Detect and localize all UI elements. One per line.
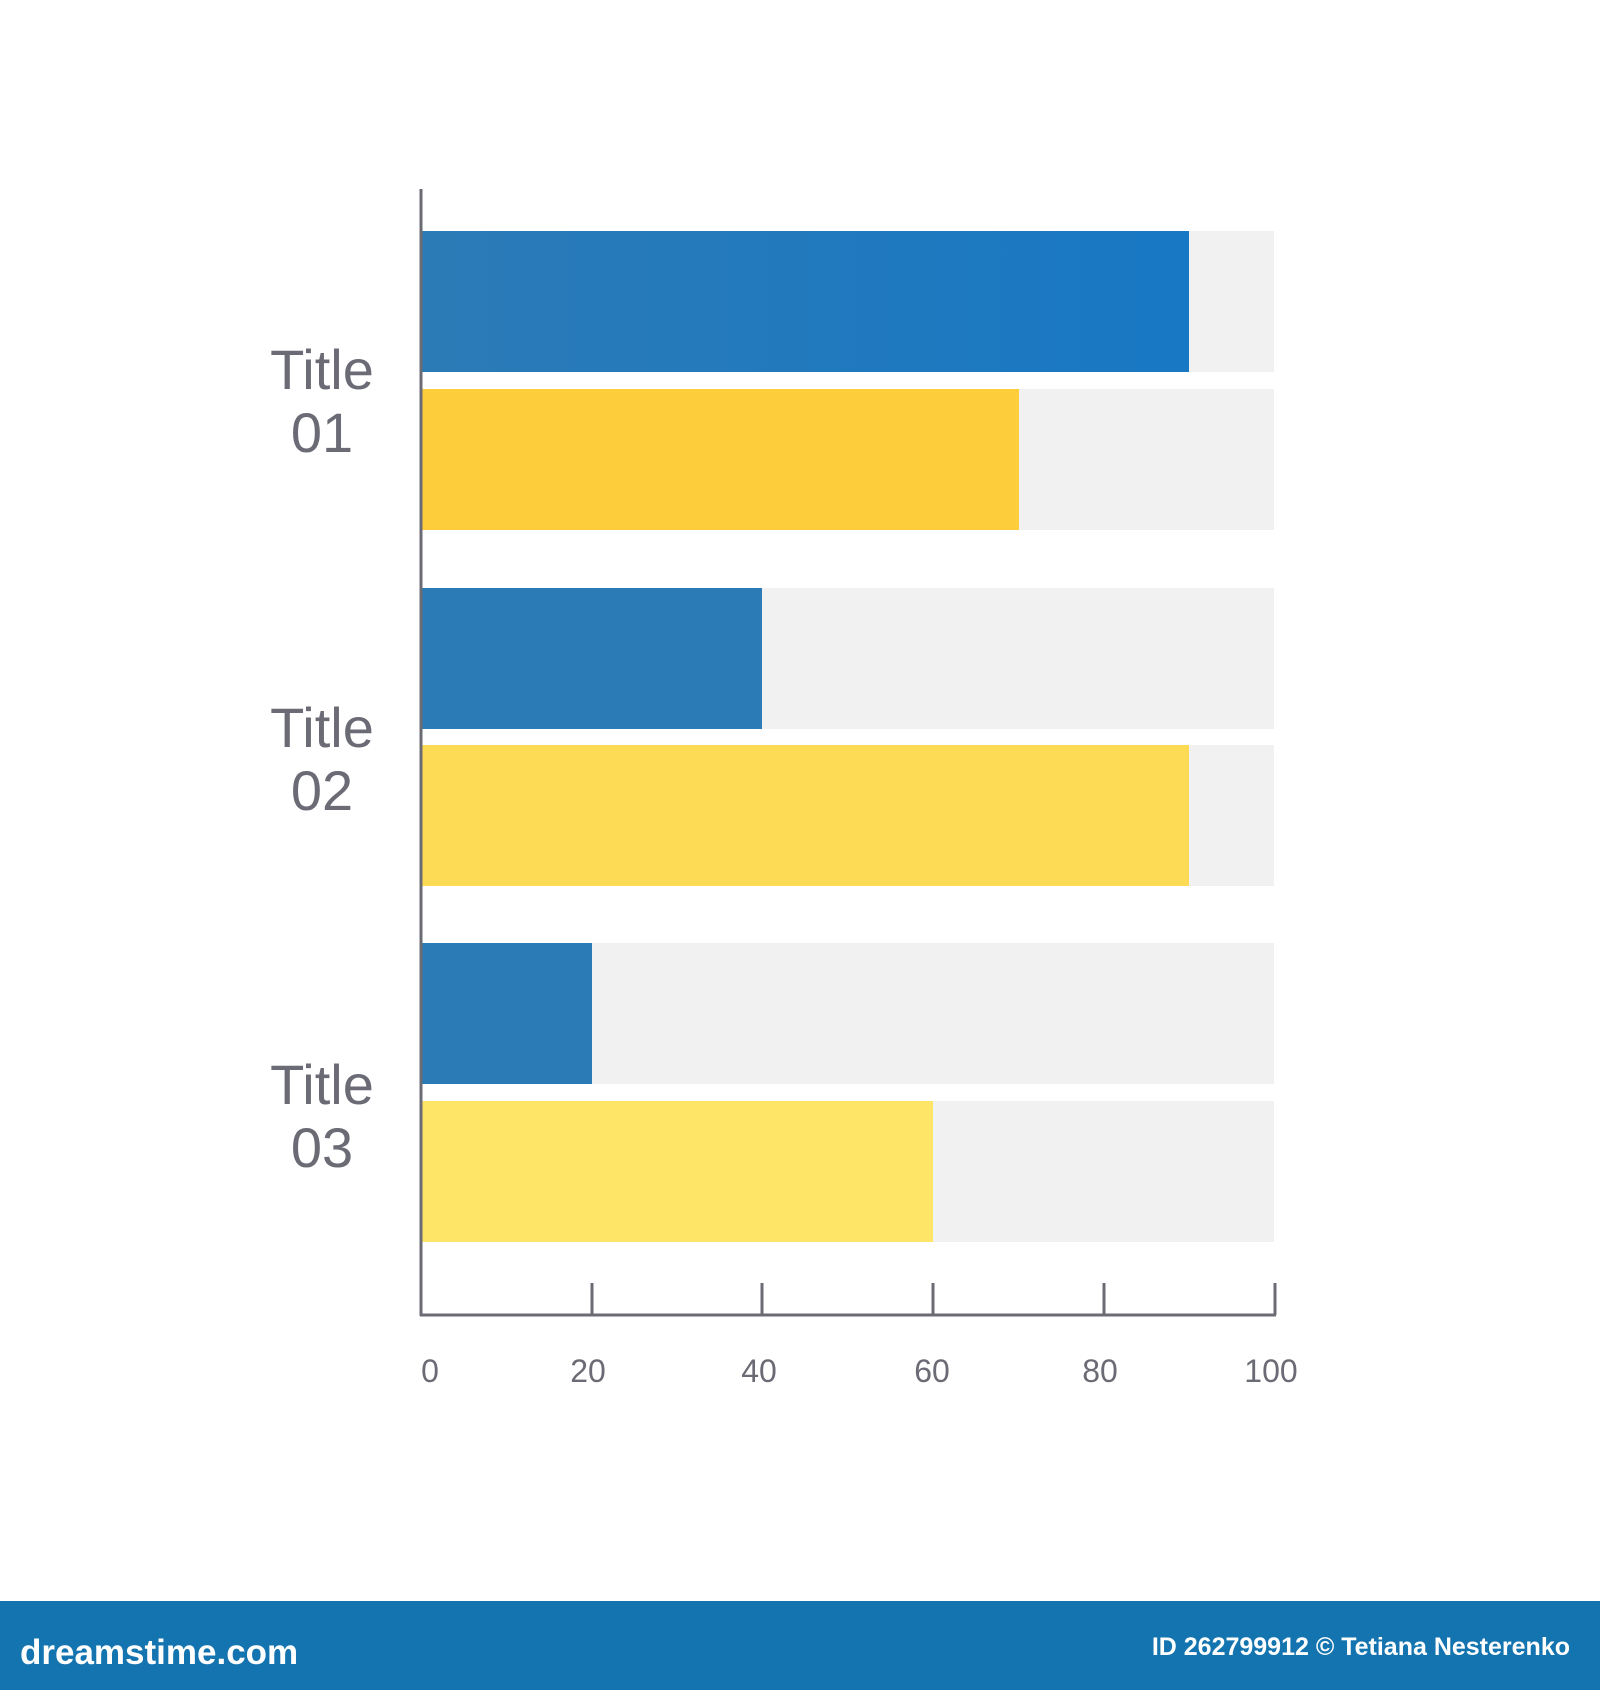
tick labels <box>421 1353 1298 1389</box>
axes <box>420 189 1276 1316</box>
group 1 bars <box>422 231 1274 530</box>
category titles: Title <box>270 338 374 401</box>
category titles: 01 <box>291 401 353 464</box>
tick labels: 20 <box>570 1353 606 1389</box>
footer bar <box>0 1601 1600 1690</box>
group 2 bars <box>422 588 1274 886</box>
category titles: Title <box>270 1053 374 1116</box>
tick labels: 60 <box>914 1353 950 1389</box>
footer bar: dreamstime.com <box>20 1633 298 1672</box>
group 3 bars <box>422 943 1274 1242</box>
tick labels: 100 <box>1244 1353 1298 1389</box>
category titles <box>270 338 374 1179</box>
category titles: Title <box>270 696 374 759</box>
footer bar: ID 262799912 © Tetiana Nesterenko <box>1152 1633 1570 1661</box>
category titles: 03 <box>291 1116 353 1179</box>
tick labels: 40 <box>741 1353 777 1389</box>
tick labels: 0 <box>421 1353 439 1389</box>
category titles: 02 <box>291 759 353 822</box>
tick labels: 80 <box>1082 1353 1118 1389</box>
